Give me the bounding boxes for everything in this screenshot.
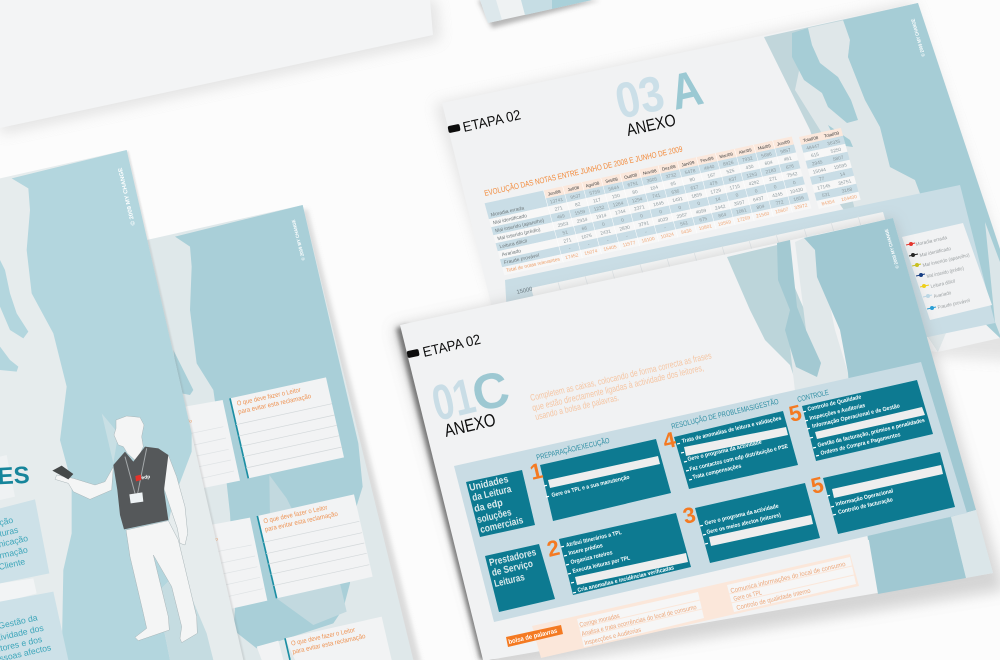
copyright: 03A: © 2009 MY CHANGE [909,17,927,57]
panel: chart area [505,185,995,400]
page: reclamation sheet behind [147,205,421,660]
table: monthly notes: 0 [621,217,625,224]
heading: 01C: C [467,360,515,423]
word bag: Controlo de qualidade interno [736,588,812,612]
legend: Mal inserido (prédio) [926,266,965,280]
table: monthly notes: 9430 [680,228,693,236]
table: monthly notes: - [607,238,610,244]
legend: Mal inserido (aparelho) [922,252,971,269]
table: monthly notes: Mal identificado [492,213,528,226]
table: monthly notes: Jul/08 [567,185,580,192]
table: monthly notes: 5478 [684,168,697,176]
card: reclamation question 2 [257,494,373,598]
step label: ETAPA 02: ETAPA 02 [461,106,522,135]
copyright: 01C: © 2009 MY CHANGE [883,228,900,269]
box 5 bottom: 5 [808,472,826,499]
table: monthly notes: 2431 [600,229,612,237]
table: monthly notes: 525 [726,168,736,175]
card: reclamation question 1: para evitar esta reclamação [238,393,312,416]
panel: left text block 1 [0,499,49,583]
box: Unidades de Leitura [466,470,535,537]
table: monthly notes: 4245 [772,191,784,199]
box: Unidades de Leitura: da edp [473,498,504,515]
table: monthly notes: 4640 [703,164,716,172]
table: monthly notes: 3605 [646,176,658,184]
table: monthly notes: 80 [632,189,639,196]
table: monthly notes: 2371 [634,204,646,212]
table: yearly totals: 5250 [830,147,842,155]
legend [902,223,992,320]
box 3 [680,483,820,563]
table: yearly totals: 48447 [806,143,821,152]
table: yearly totals: Total/09 [823,130,840,139]
table: monthly notes: 271 [768,176,778,183]
card: reclamation question 1: O que deve fazer o Leitor [236,387,302,408]
page: top-left sheet [0,0,440,134]
table: monthly notes: 66 [581,225,588,232]
panel: process diagram background [454,362,967,622]
table: monthly notes: Set/08 [605,176,619,184]
table: monthly notes: 604 [764,160,774,167]
table: monthly notes: Jun/09 [776,139,791,147]
box 2: Insere prédios [568,543,604,557]
table: monthly notes: 1559 [574,209,586,217]
table: monthly notes: 1859 [691,192,703,200]
panel: left text block 2 [0,592,68,660]
table: monthly notes: Ago/08 [585,180,600,188]
heading: 03A [610,59,708,130]
word bag label: bolsa de palavras [508,628,558,646]
box 4 [660,411,798,489]
intro text: Completem as caixas, colocando de forma correcta as frases [529,350,713,403]
heading: ANEXO: ANEXO [625,110,678,140]
table: monthly notes: 469 [556,213,566,221]
table: monthly notes: 18100 [641,236,656,245]
table: monthly notes: 271 [554,205,564,213]
table: monthly notes: 0 [792,180,797,186]
tab marker [407,349,420,358]
table: yearly totals: Total/08 [802,135,819,143]
box 2: 2 [544,535,562,562]
table: monthly notes: 1656 [793,195,805,203]
table: monthly notes: 636 [671,188,681,196]
page: top-centre sheet [478,0,600,28]
table: monthly notes: 80 [689,177,696,183]
heading: 03A: A [665,59,708,121]
vest [113,447,168,529]
table: yearly totals: 5807 [832,155,845,163]
box: Prestadores: de Serviço [491,559,534,579]
table: monthly notes: 0 [601,221,606,228]
table: monthly notes: 13741 [549,197,564,206]
box 2: Atribui Itinerários a TPL [566,530,623,549]
table: monthly notes: Moradia errada [490,205,525,218]
box 5 bottom: Informação Operacional [835,488,894,508]
table: monthly notes: 15405 [603,244,618,253]
table: monthly notes: Fraude provável [503,253,540,266]
lanyard and badge [125,448,147,503]
card: reclamation question 2: para evitar esta reclamação [264,511,339,534]
box 4: Trata de anomalias de leitura e validações [681,416,782,445]
box 3: Gere o programa da actividade [704,503,780,527]
table: monthly notes: - [645,230,648,235]
intro text: que estão directamente ligadas à actividade dos leitores, [531,363,705,413]
table: monthly notes: 7542 [786,171,799,179]
legend: Avariado [933,290,952,300]
table: monthly notes: 772 [775,199,785,207]
box 2 [544,513,691,595]
table: yearly totals: 3168 [841,187,853,195]
box: left partial card row 2: ão [213,537,218,542]
box 5 top: Informação Operacional e de Gestão [812,403,901,430]
table: monthly notes: 1645 [653,200,665,208]
box 2: Organiza roteiros [570,550,613,566]
table: monthly notes: 675 [699,216,708,224]
table: yearly totals: 77 [818,176,825,183]
table: monthly notes: 10801 [698,223,713,232]
table: monthly notes: 0 [735,192,740,199]
table: monthly notes: 430 [745,164,755,171]
box: Unidades de Leitura: comerciais [479,515,525,536]
table: monthly notes: Mal inserido (aparelho) [495,218,545,234]
box: Unidades de Leitura: Unidades [468,474,510,494]
box 4: Gere o programa da actividade [687,439,763,463]
legend: Mal identificado [919,246,952,259]
table: monthly notes: Mal inserido (prédio) [497,227,542,242]
table: monthly notes: 676 [785,163,795,171]
table: monthly notes: 2957 [676,212,688,220]
table: monthly notes: 617 [690,184,700,192]
table: monthly notes: 1294 [631,196,644,205]
table: monthly notes: 117 [592,197,602,205]
table: monthly notes: 2953 [557,221,569,229]
table: monthly notes: 9537 [570,193,582,201]
table: monthly notes: - [568,247,572,252]
table: monthly notes: 0 [754,188,759,195]
box: left partial card row 1 [185,400,240,488]
table: monthly notes: 65 [670,181,677,188]
table: monthly notes: 17452 [565,252,580,261]
legend: Moradia errada [915,235,948,248]
illustration: meter reader [52,416,197,643]
heading: ANEXO: ANEXO [442,409,498,441]
table: monthly notes: 8926 [722,160,735,168]
table: monthly notes: 551 [680,220,689,228]
table: monthly notes: 10559 [717,219,732,228]
table: monthly notes: 82 [574,201,582,208]
table: monthly notes: Jun/08 [547,189,562,197]
table: monthly notes: 3732 [665,172,677,180]
box 4: 4 [660,427,679,454]
table: monthly notes: 33972 [794,203,809,211]
header: resolução: RESOLUÇÃO DE PROBLEMAS/GESTÃO [670,397,780,431]
table: monthly notes: 2183 [765,167,777,175]
table title: EVOLUÇÃO DAS NOTAS ENTRE JUNHO DE 2008 E JUNHO DE 2009 [483,144,684,198]
table: yearly totals: 17145 [817,183,832,192]
logo: edp: edp [141,474,151,481]
table: monthly notes: - [664,226,667,231]
box: Unidades de Leitura: da Leitura [471,484,513,504]
table: monthly notes: 1253 [746,171,758,180]
table: monthly notes: - [587,243,591,248]
table: monthly notes: 7932 [742,156,754,164]
table: monthly notes: 3791 [638,220,650,228]
box 2: Cria anomalias e incidências verificadas [577,565,675,594]
table: monthly notes: 0 [678,205,682,211]
table: monthly notes: 0 [659,209,663,215]
page: annex 03A [435,2,1000,400]
table: monthly notes: 804 [756,204,766,211]
table: yearly totals: 15044 [812,167,827,176]
table: monthly notes: 14 [715,196,722,203]
box 4: Trata compensações [692,464,742,481]
logo: edp [135,474,151,481]
table: monthly notes: 1715 [729,184,741,192]
table: monthly notes: 15607 [775,207,789,215]
header: preparação: PREPARAÇÃO/EXECUÇÃO [535,436,611,462]
box 2: Executa leituras por TPL [572,555,631,575]
table: monthly notes: 2934 [576,217,589,225]
box 5 top: Ordens de Compra e Pagamentos [820,432,901,457]
table: monthly notes: 17259 [736,215,751,224]
header: controle: CONTROLE [796,388,830,404]
table: monthly notes: 2830 [619,224,631,233]
panel: chart area: 15000 [516,287,533,296]
intro text: usando a bolsa de palavras. [534,392,620,422]
box 3: 3 [680,502,698,529]
box 5 top [786,380,933,461]
table: monthly notes: 150 [611,193,621,200]
table: monthly notes: 51 [562,229,569,236]
page: annex 01C [393,218,1000,660]
word bag: Inspecções e Auditorias [584,627,642,647]
table: monthly notes: 741 [652,193,661,200]
copyright: reclamation sheet: © 2009 MY CHANGE [290,219,306,261]
table: monthly notes: 4099 [695,208,707,216]
table: yearly totals: 14 [839,171,846,178]
legend: Fraude provável [937,298,971,311]
card: reclamation question 2: O que deve fazer o Leitor [263,504,329,525]
page: person sheet [0,150,245,660]
person body [55,416,197,643]
box: left partial card row 1: ão [187,419,192,424]
table: monthly notes: 6437 [752,195,765,204]
table: monthly notes: 461 [783,155,793,163]
table: yearly totals: 2945 [811,159,824,167]
table: monthly notes: 5686 [761,151,773,160]
table: monthly notes: 4292 [748,179,760,188]
table: yearly totals: 615 [810,152,820,159]
table: monthly notes: Jan/09 [681,160,696,167]
table: monthly notes: 104 [650,185,659,192]
table: yearly totals: 36335 [827,139,842,147]
box 1: Gere os TPL e a sua manutenção [551,475,631,499]
table: yearly totals: 84354 [821,199,836,207]
table: monthly notes: Nov/08 [642,168,658,176]
table: monthly notes: 167 [707,172,717,180]
table: monthly notes: 1744 [614,208,627,217]
table: yearly totals: 19595 [833,162,848,171]
table: monthly notes: 11577 [622,240,637,249]
legend: Leitura difícil [930,279,956,290]
table: monthly notes: 5759 [589,189,601,197]
box 5 top: Gestão da facturação, prémios e penalidades [817,418,925,449]
table: monthly notes: Mar/09 [719,151,734,159]
table: monthly notes: 1076 [581,233,593,241]
box 5 top: Inspecções e Auditorias [809,403,866,422]
box: Prestadores [485,544,555,612]
table: monthly notes: 9857 [780,147,792,155]
table: yearly totals: 35751 [838,178,852,187]
card: reclamation question 3 [285,617,392,660]
table: monthly notes: 2442 [714,204,727,212]
step label: ETAPA 02: ETAPA 02 [421,331,482,360]
table: yearly totals [799,128,861,209]
word bag: Comunica informações do local de consumo [730,561,847,595]
table: yearly totals: 531 [821,191,831,199]
table: monthly notes: 0 [640,213,644,220]
table: monthly notes: - [626,234,629,240]
table: monthly notes: Avariado [501,248,522,258]
box: left partial card row 3 [257,641,283,660]
table: monthly notes: 6751 [627,180,639,189]
word bag [532,554,859,658]
heading: 03A: 03 [610,65,669,130]
tab marker [448,124,461,133]
table: monthly notes: 271 [563,237,573,245]
table: monthly notes: 5844 [608,185,620,193]
table: monthly notes: Abr/09 [738,147,753,155]
word bag: Analisa e trata ocorrências do local de consumo [581,604,698,638]
table: monthly notes [485,136,811,275]
table: monthly notes: 637 [728,176,738,183]
card: reclamation question 3: para evitar esta reclamação [292,633,366,656]
table: monthly notes: Leitura difícil [499,238,528,250]
table: monthly notes: 864 [718,212,727,219]
table: monthly notes: 4029 [657,216,669,224]
table: monthly notes: 0 [773,184,778,191]
box: left partial card row 2 [210,518,267,609]
box 4: Faz contactos com edp distribuição e PSE [689,444,789,473]
table: monthly notes: 1061 [736,207,748,216]
box: Unidades de Leitura: soluções [476,507,513,526]
table: monthly notes: 0 [697,201,701,207]
table: monthly notes: Total de notas relevantes [506,256,561,274]
table: yearly totals: 104400 [841,194,858,203]
table: monthly notes: 10324 [660,232,675,240]
table: monthly notes: 1491 [672,196,684,204]
table: monthly notes: Mai/09 [757,143,772,151]
table: monthly notes: 1232 [593,205,605,213]
card: reclamation question 1 [230,377,344,478]
box 3: Gere os meios afectos (leitores) [706,513,781,536]
box 5 bottom [808,452,955,534]
card: reclamation question 3: O que deve fazer o Leitor [291,627,356,648]
table: monthly notes: 1914 [595,213,608,221]
table: monthly notes: 3597 [733,200,746,208]
box 5 top: Controlo de Qualidade [807,394,863,413]
table: monthly notes: 1729 [710,188,722,196]
table: monthly notes: 10430 [789,187,804,195]
intro text [529,350,713,422]
box: Prestadores: Prestadores [488,547,538,569]
box 5 top: 5 [786,400,804,427]
word bag: Corrige moradas [579,613,621,629]
table: monthly notes: 1264 [612,201,625,209]
box 1 [527,439,671,521]
copyright: person sheet: © 2009 MY CHANGE [117,167,137,226]
table: monthly notes: Fev/09 [700,156,715,163]
heading: 01C: 01 [427,368,480,432]
box 5 bottom: Controlo de facturação [838,497,894,516]
box 1: 1 [527,458,545,485]
table: monthly notes: Dez/08 [661,164,677,172]
reading device [52,466,73,479]
table: monthly notes: Out/08 [624,172,638,180]
table: monthly notes: 21560 [756,211,770,220]
box: Prestadores: Leituras [493,572,526,590]
word bag: Gere os TPL [733,589,763,603]
table: monthly notes: 15074 [584,248,599,257]
table: monthly notes: 479 [709,180,719,188]
